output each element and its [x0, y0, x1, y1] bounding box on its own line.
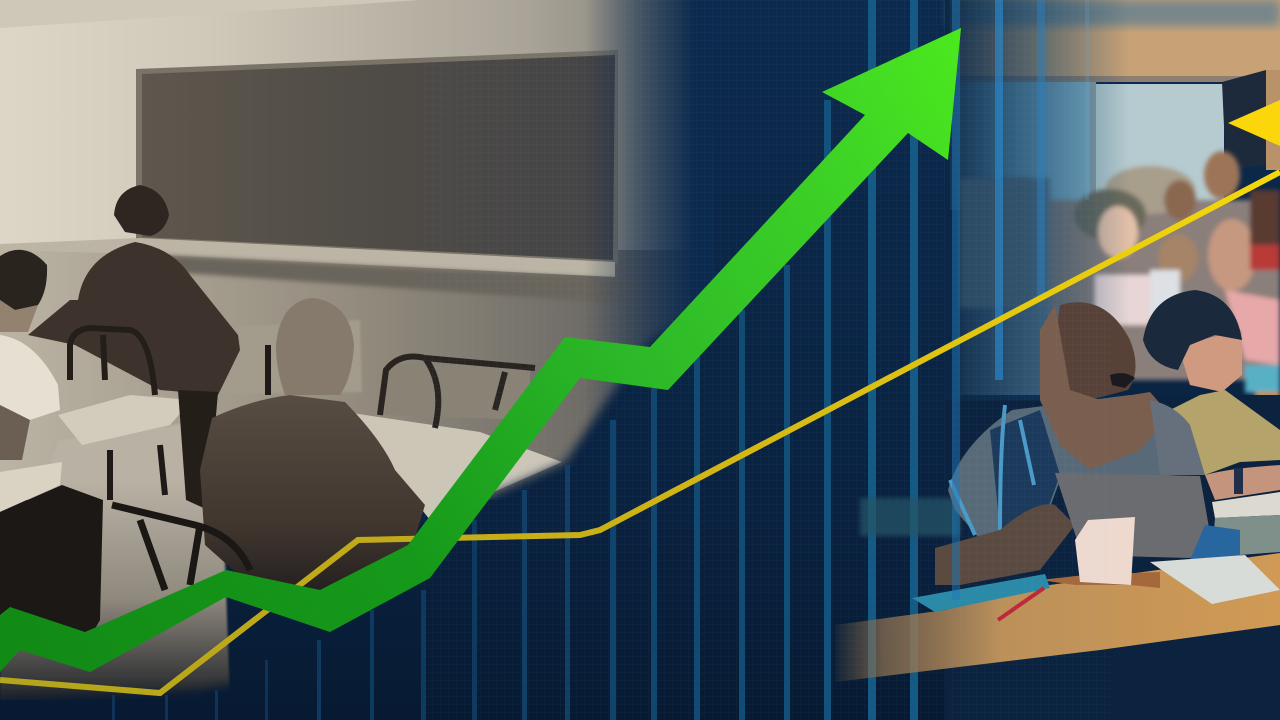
classroom wall — [0, 0, 687, 250]
stack of books — [1190, 492, 1280, 560]
left front desk — [0, 462, 62, 512]
student left foreground — [0, 250, 60, 460]
student left with tablet — [935, 302, 1178, 585]
photo left fade overlay — [945, 0, 1135, 400]
student right — [1143, 290, 1280, 500]
green growth arrow — [0, 28, 961, 672]
white and pink box — [1075, 517, 1135, 585]
empty chair — [380, 356, 535, 428]
vintage classroom photo — [0, 0, 715, 700]
red pen — [998, 588, 1044, 620]
vertical bar chart lines — [112, 0, 918, 720]
right edge fade to navy — [585, 0, 715, 510]
pale window panels — [950, 76, 1280, 214]
open notebook — [1150, 555, 1280, 604]
blue tablet strip — [912, 574, 1050, 612]
middle desk — [58, 395, 192, 445]
left crowd shadow — [960, 178, 1030, 308]
bench — [860, 498, 960, 536]
table — [835, 553, 1280, 682]
ceiling moulding — [0, 0, 420, 28]
hand on table — [1040, 572, 1160, 588]
right desk — [345, 412, 562, 520]
wall screen — [1222, 70, 1268, 170]
shadow under tray — [166, 252, 615, 300]
lower wall — [0, 250, 710, 500]
dark desk block left — [0, 485, 103, 632]
wall right strip — [1266, 70, 1280, 170]
open chair back wall — [467, 365, 530, 419]
grid texture — [420, 0, 1120, 720]
crowd — [960, 151, 1280, 408]
modern classroom photo — [835, 0, 1280, 720]
yellow arrowhead — [1228, 100, 1280, 146]
student center back — [28, 185, 240, 510]
laptop — [1055, 473, 1212, 558]
chair center back — [70, 328, 155, 395]
chair foreground — [112, 505, 250, 590]
chalk tray — [0, 238, 615, 277]
floor gray — [0, 420, 230, 700]
rear desk top — [282, 320, 362, 392]
foreground blue grid lines on modern photo — [952, 0, 1089, 600]
ceiling top strip — [950, 0, 1280, 26]
dark lower backdrop — [945, 395, 1280, 720]
ceiling — [950, 0, 1280, 80]
blackboard — [136, 50, 618, 264]
grid texture over modern photo — [950, 0, 1110, 720]
student foreground right — [200, 298, 425, 610]
desk legs — [110, 345, 268, 500]
